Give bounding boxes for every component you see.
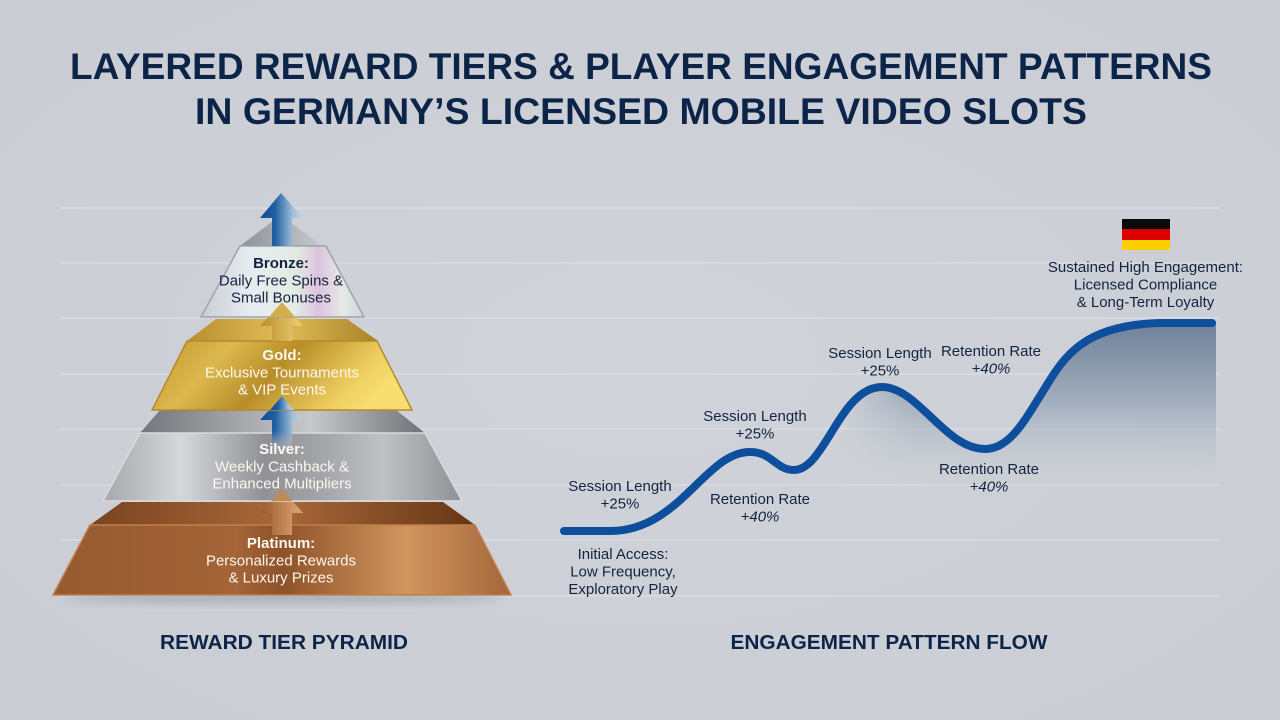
arrow: gold tip over bronze	[269, 302, 295, 317]
arrow: blue middle	[260, 396, 303, 448]
heading: engagement pattern flow: ENGAGEMENT PATTERN FLOW	[730, 632, 1048, 654]
label: initial access: Exploratory Play	[568, 581, 678, 598]
heading: reward tier pyramid: REWARD TIER PYRAMID	[160, 632, 408, 654]
label: retention rate 3: Retention Rate	[939, 461, 1039, 478]
arrow: copper tip over silver	[272, 489, 292, 501]
label: retention rate 1: Retention Rate	[710, 491, 810, 508]
text: gold: Gold:	[262, 347, 302, 364]
text: platinum: Personalized Rewards	[206, 552, 356, 569]
arrow: blue tip over gold	[270, 396, 294, 410]
label: retention rate 3: +40%	[970, 478, 1008, 496]
text: bronze: Daily Free Spins &	[219, 272, 343, 289]
label: retention rate 2: +40%	[972, 360, 1010, 378]
chart: engagement pattern flow	[564, 323, 1216, 531]
title: LAYERED REWARD TIERS & PLAYER ENGAGEMENT PATTERNS	[70, 46, 1212, 87]
label: session length 2: Session Length	[703, 408, 807, 425]
text: silver: Silver:	[259, 441, 305, 458]
label: retention rate 2: Retention Rate	[941, 343, 1041, 360]
label: initial access: Low Frequency,	[570, 564, 676, 580]
label: initial access: Initial Access:	[578, 546, 668, 563]
arrow: blue top	[260, 193, 303, 246]
text: platinum: & Luxury Prizes	[228, 570, 334, 587]
text: silver: Enhanced Multipliers	[212, 476, 352, 493]
text: bronze: Small Bonuses	[231, 290, 331, 307]
tier: silver	[103, 396, 462, 501]
title	[70, 46, 1212, 132]
area under curve	[854, 323, 1216, 453]
label: sustained high engagement: Sustained High Engagement:	[1048, 259, 1243, 276]
text: silver: Weekly Cashback &	[215, 458, 349, 475]
label: session length 3: +25%	[861, 362, 899, 380]
text: gold: & VIP Events	[238, 382, 326, 399]
label: session length 1: Session Length	[568, 478, 672, 495]
tier: bronze (iridescent top)	[201, 193, 364, 317]
label: session length 2: +25%	[736, 426, 774, 442]
text: bronze: Bronze:	[253, 255, 309, 272]
panel: reward tier pyramid	[53, 193, 511, 603]
label: session length 3: Session Length	[828, 345, 932, 362]
tier: platinum (copper)	[53, 489, 511, 595]
label: retention rate 1: +40%	[741, 508, 779, 526]
text: platinum: Platinum:	[247, 535, 315, 552]
engagement curve	[564, 323, 1212, 531]
arrow: copper	[260, 489, 303, 535]
icon: german flag	[1122, 219, 1170, 250]
label: session length 1: +25%	[601, 496, 639, 512]
label: sustained high engagement: & Long-Term Loyalty	[1077, 294, 1215, 311]
tier: gold	[152, 302, 412, 410]
text: gold: Exclusive Tournaments	[205, 364, 359, 381]
title: IN GERMANY’S LICENSED MOBILE VIDEO SLOTS	[195, 91, 1087, 132]
label: sustained high engagement: Licensed Compliance	[1074, 276, 1217, 294]
arrow: gold	[260, 302, 303, 341]
